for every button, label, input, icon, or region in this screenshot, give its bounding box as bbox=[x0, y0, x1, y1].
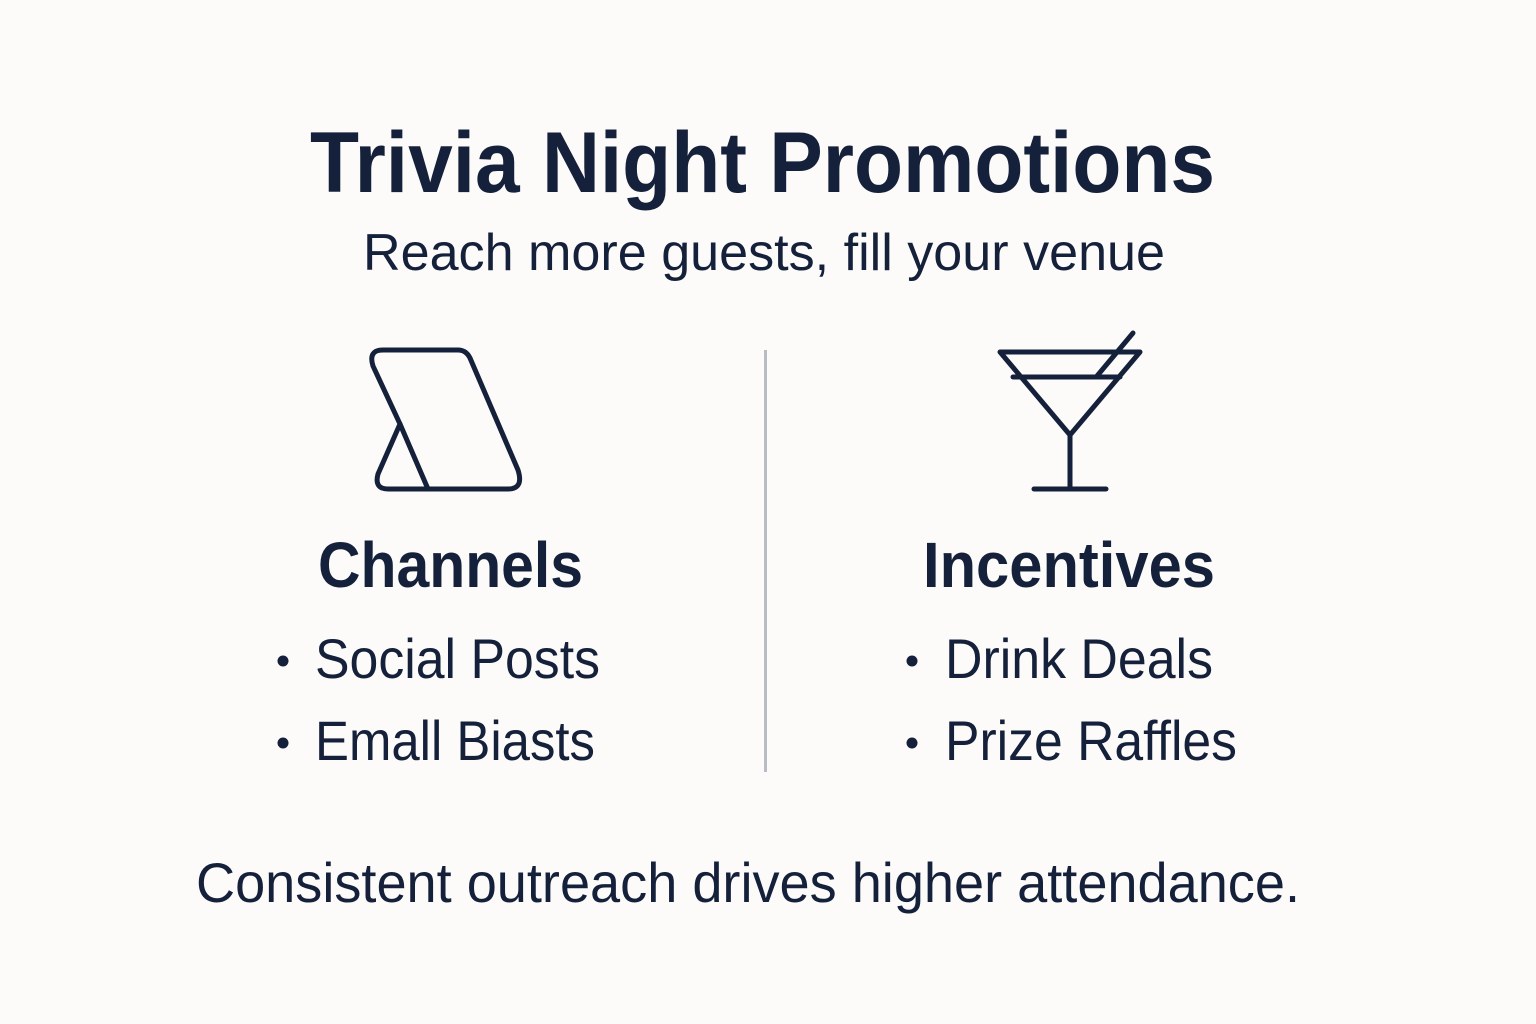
heading: incentives: Incentives bbox=[923, 529, 1215, 601]
list: incentives: Prize Raffles bbox=[945, 709, 1237, 772]
panel: channels bbox=[278, 350, 600, 772]
list: incentives bbox=[906, 627, 1237, 772]
title: Trivia Night Promotions bbox=[310, 115, 1215, 211]
list: channels bbox=[278, 627, 600, 772]
footer text: Consistent outreach drives higher attendance. bbox=[196, 851, 1300, 914]
list: channels: Social Posts bbox=[315, 627, 600, 690]
list: incentives: Drink Deals bbox=[945, 627, 1213, 690]
panel: incentives bbox=[906, 333, 1237, 772]
heading: channels: Channels bbox=[318, 529, 583, 601]
divider bbox=[764, 350, 767, 772]
list: channels: Emall Biasts bbox=[315, 709, 595, 772]
icon: martini glass bbox=[1000, 333, 1140, 489]
icon: tablet bbox=[372, 350, 520, 489]
subtitle: Reach more guests, fill your venue bbox=[363, 224, 1165, 282]
